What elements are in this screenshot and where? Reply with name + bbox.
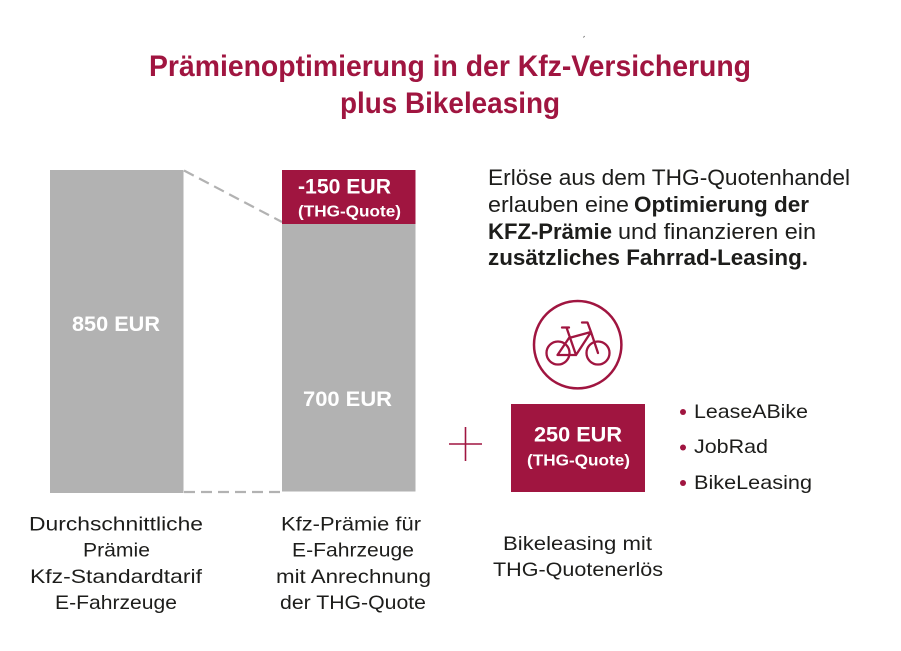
caption: average premium: E-Fahrzeuge: [55, 592, 177, 614]
explanatory text block: KFZ-Prämie: [488, 219, 612, 244]
list of leasing providers: JobRad: [694, 436, 768, 458]
explanatory text block: zusätzliches Fahrrad-Leasing.: [488, 245, 808, 270]
caption: premium for electric vehicles: der THG-Quote: [280, 592, 426, 614]
caption: average premium: [29, 514, 203, 614]
box: 250 EUR bike leasing: (THG-Quote): [527, 452, 630, 470]
explanatory text block: [488, 165, 850, 270]
bar segment: -150 EUR THG quota: [282, 170, 416, 224]
bar: average premium 850 EUR: 850 EUR: [72, 313, 160, 336]
list of leasing providers: BikeLeasing: [694, 472, 812, 494]
explanatory text block: Optimierung der: [634, 192, 809, 217]
icon: bicycle in circle: [534, 301, 621, 388]
connector lines between bars: [184, 170, 282, 492]
caption: average premium: Durchschnittliche: [29, 514, 203, 536]
bar: average premium 850 EUR: [50, 170, 184, 493]
caption: premium for electric vehicles: Kfz-Prämie für: [281, 514, 422, 536]
caption: premium for electric vehicles: [276, 514, 431, 614]
caption: average premium: Kfz-Standardtarif: [30, 566, 203, 588]
title: [149, 50, 751, 120]
list of leasing providers: [680, 401, 812, 494]
caption: premium for electric vehicles: E-Fahrzeuge: [292, 540, 414, 562]
caption: bike leasing: [493, 533, 663, 581]
bar segment: -150 EUR THG quota: (THG-Quote): [298, 204, 401, 220]
caption: average premium: Prämie: [83, 540, 150, 562]
title: plus Bikeleasing: [340, 87, 560, 120]
caption: bike leasing: Bikeleasing mit: [503, 533, 653, 555]
caption: premium for electric vehicles: mit Anrechnung: [276, 566, 431, 588]
bar segment: -150 EUR THG quota: -150 EUR: [298, 176, 391, 198]
plus sign: [449, 427, 482, 461]
explanatory text block: Erlöse aus dem THG-Quotenhandel: [488, 165, 850, 190]
explanatory text block: und finanzieren ein: [618, 219, 816, 244]
bar: premium with THG quota 700 EUR: [282, 224, 416, 492]
title: Prämienoptimierung in der Kfz-Versicherung: [149, 50, 751, 83]
box: 250 EUR bike leasing: [511, 404, 645, 492]
list of leasing providers: LeaseABike: [694, 401, 808, 423]
caption: bike leasing: THG-Quotenerlös: [493, 559, 663, 581]
explanatory text block: erlauben eine: [488, 192, 629, 217]
box: 250 EUR bike leasing: 250 EUR: [534, 424, 622, 446]
small stray mark: [584, 36, 585, 38]
bar: premium with THG quota 700 EUR: 700 EUR: [303, 388, 392, 411]
